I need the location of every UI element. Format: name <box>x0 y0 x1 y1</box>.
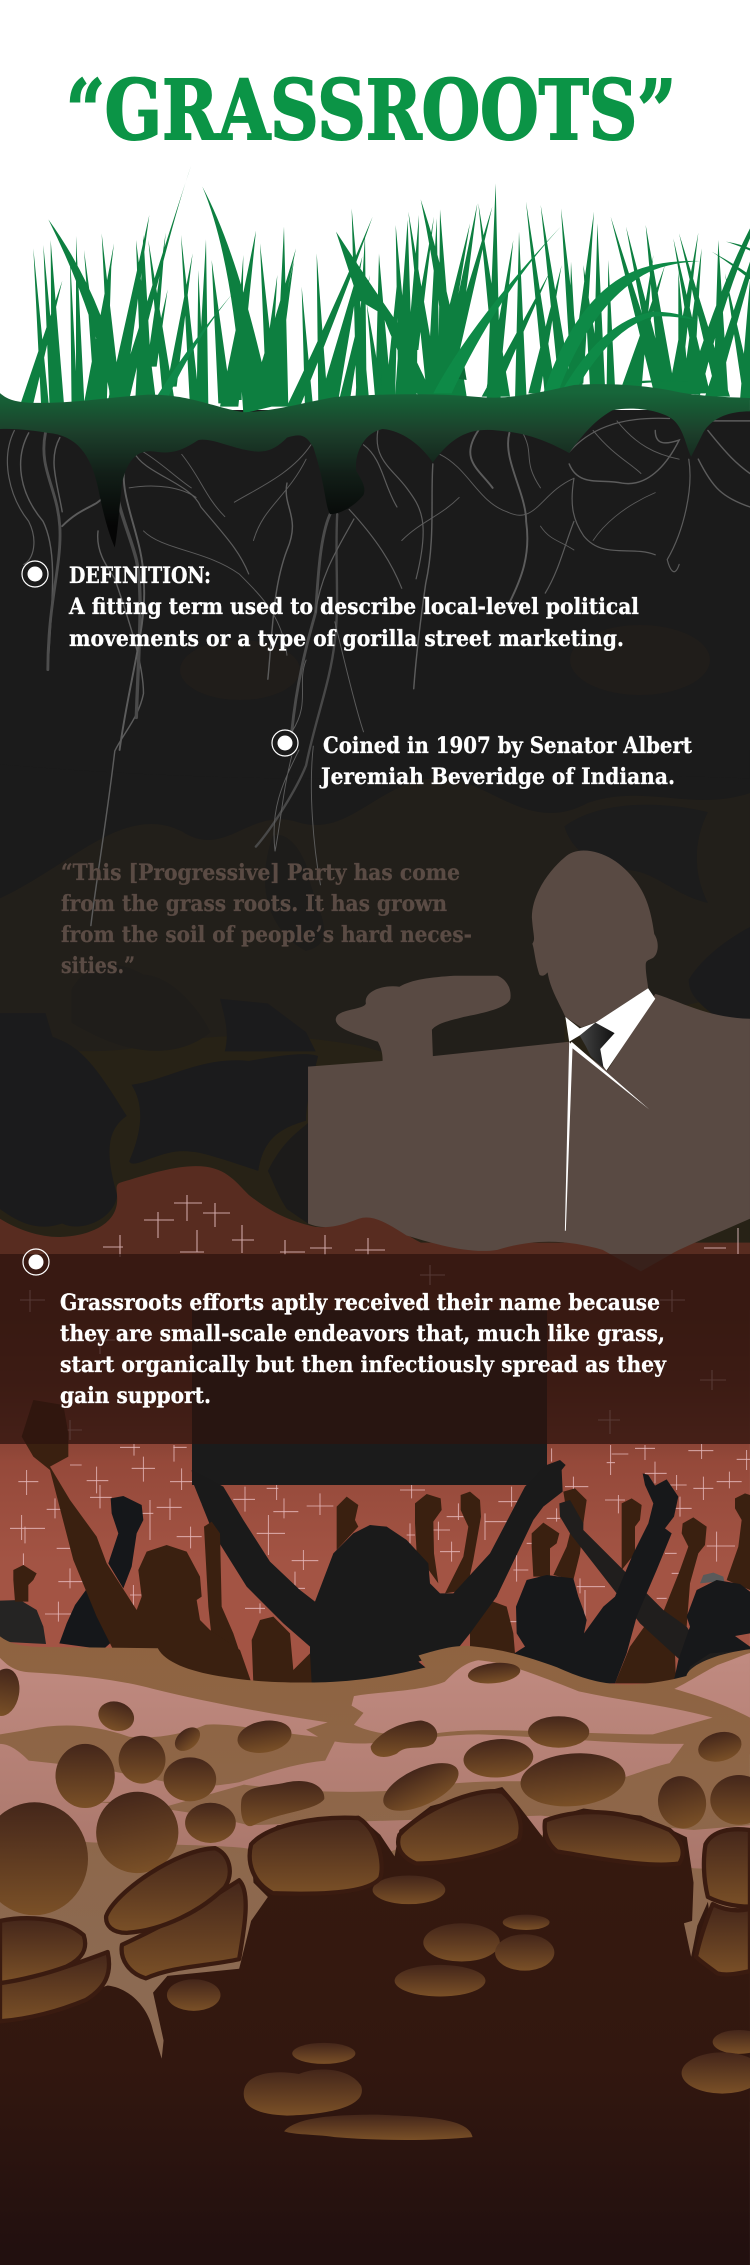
crowd left side <box>0 1400 566 1687</box>
earth base <box>0 1636 750 2122</box>
definition text: DEFINITION: <box>69 563 211 589</box>
speaker at podium <box>308 850 750 1271</box>
tie <box>580 1023 615 1068</box>
far left fist <box>13 1565 37 1602</box>
stones: small upper <box>0 1660 750 2140</box>
podium and suit <box>308 976 750 1271</box>
earth strata with stones <box>0 1636 750 2265</box>
far left man <box>0 1600 46 1644</box>
senator quote <box>61 860 472 979</box>
translucent text band <box>0 1254 750 1444</box>
crowd silhouettes <box>0 1400 750 1687</box>
small fist behind central figure <box>337 1497 358 1550</box>
man with thumb raised <box>512 1473 678 1683</box>
senator quote: “This [Progressive] Party has come <box>61 860 460 886</box>
roots <box>7 418 750 926</box>
shirt collar <box>565 988 655 1070</box>
grass blades right <box>367 183 750 400</box>
grassroots efforts text: gain support. <box>60 1383 211 1409</box>
grass blades left <box>21 166 387 417</box>
central figure <box>192 1460 566 1687</box>
arm behind head <box>204 1522 240 1653</box>
grassroots efforts text: Grassroots efforts aptly received their name because <box>60 1290 660 1316</box>
brown figure with raised fist <box>22 1400 252 1683</box>
definition block <box>22 561 639 652</box>
senator quote: from the soil of people’s hard neces- <box>61 922 472 948</box>
grassroots efforts text: start organically but then infectiously spread as they <box>60 1352 667 1378</box>
protest sign <box>192 1310 547 1485</box>
background: white sky <box>0 0 750 430</box>
definition text: movements or a type of gorilla street marketing. <box>69 626 624 652</box>
definition text <box>68 563 639 652</box>
brick cracks lower left <box>10 1444 333 1622</box>
background raised arms <box>415 1488 750 1683</box>
dark soil background <box>0 410 750 1310</box>
crowd right side <box>415 1473 750 1683</box>
speaker head <box>532 850 658 1027</box>
coined text <box>319 733 693 790</box>
senator quote: from the grass roots. It has grown <box>61 891 447 917</box>
coined block <box>272 730 693 790</box>
coined text: Jeremiah Beveridge of Indiana. <box>319 764 675 790</box>
turf band with drips <box>0 384 750 548</box>
stones: outlined large <box>0 1791 750 2021</box>
dark raised arm <box>59 1496 143 1649</box>
grassroots efforts text <box>60 1290 667 1409</box>
brick layer with cracks <box>0 1166 750 1754</box>
grass <box>0 166 750 548</box>
grassroots efforts text: they are small-scale endeavors that, much like grass, <box>60 1321 665 1347</box>
grey hair detail <box>700 1573 725 1585</box>
pink strata <box>0 1653 750 1806</box>
deep soil <box>0 1787 750 2265</box>
bullet: coined <box>272 730 298 756</box>
suit lapel lines <box>565 1042 650 1231</box>
definition text: A fitting term used to describe local-level political <box>68 594 639 620</box>
crossing arm <box>559 1500 750 1683</box>
small head <box>252 1617 312 1683</box>
supporting text block <box>23 1249 667 1409</box>
brick cracks upper <box>20 1195 738 1440</box>
brick cracks lower right <box>400 1444 750 1623</box>
bullet: definition <box>22 561 48 587</box>
senator quote: sities.” <box>61 953 135 979</box>
lower pink strata <box>0 1801 750 1897</box>
bullet: grassroots efforts <box>23 1249 49 1275</box>
right head <box>673 1580 750 1683</box>
coined text: Coined in 1907 by Senator Albert <box>323 733 693 759</box>
